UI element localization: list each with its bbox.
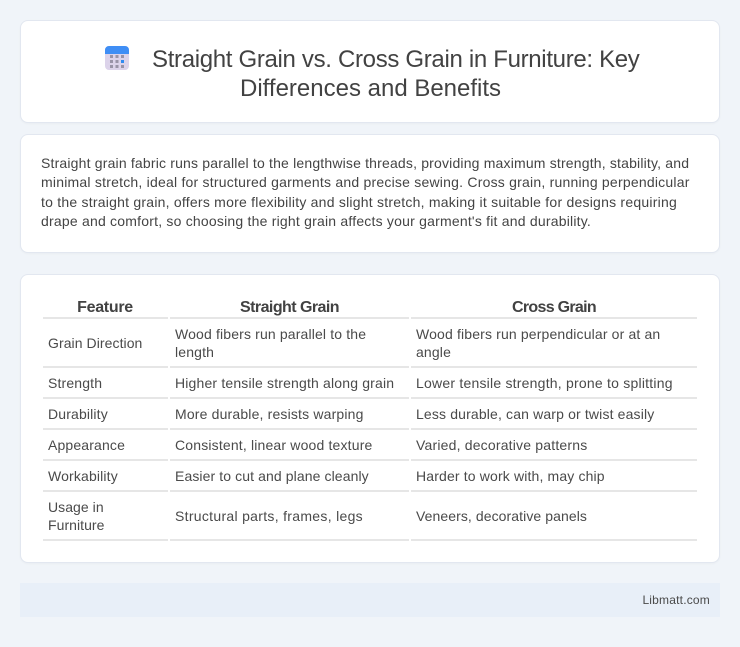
footer bar [20, 583, 720, 617]
cell: Grain Direction straight: Wood fibers run parallel to the [175, 326, 366, 342]
cell: Grain Direction cross: angle [416, 344, 451, 360]
cell: Grain Direction straight [175, 326, 366, 360]
table header: Feature: Feature [77, 299, 133, 316]
intro text: to the straight grain, offers more flexibility and slight stretch, making it suitable for designs requiring [41, 194, 677, 210]
intro text: drape and comfort, so choosing the right grain affects your garment's fit and durability. [41, 213, 591, 229]
row: Usage in Furniture [48, 499, 104, 533]
cell: Workability cross: Harder to work with, may chip [416, 468, 605, 484]
cell: Strength cross: Lower tensile strength, prone to splitting [416, 375, 673, 391]
cell: Grain Direction cross [416, 326, 660, 360]
cell: Strength straight: Higher tensile strength along grain [175, 375, 394, 391]
row: Grain Direction: Grain Direction [48, 335, 142, 351]
row: Appearance: Appearance [48, 437, 125, 453]
intro text: minimal stretch, ideal for structured garments and precise sewing. Cross grain, running perpendicular [41, 174, 690, 190]
cell: Appearance straight: Consistent, linear wood texture [175, 437, 372, 453]
title: Straight Grain vs. Cross Grain in Furniture: Key [152, 46, 639, 73]
table header: Cross Grain: Cross Grain [512, 299, 596, 316]
row: Strength: Strength [48, 375, 102, 391]
cell: Grain Direction straight: length [175, 344, 214, 360]
row: Durability: Durability [48, 406, 108, 422]
footer text: Libmatt.com [642, 593, 710, 607]
cell: Usage cross: Veneers, decorative panels [416, 508, 587, 524]
intro text [41, 155, 690, 229]
table header: Straight Grain: Straight Grain [240, 299, 339, 316]
cell: Grain Direction cross: Wood fibers run perpendicular or at an [416, 326, 660, 342]
icon: calendar [105, 46, 129, 70]
title [152, 46, 640, 102]
panel: header [20, 20, 720, 123]
row: Usage in Furniture: Usage in [48, 499, 104, 515]
row: Workability: Workability [48, 468, 118, 484]
panel: comparison table [20, 274, 720, 563]
cell: Appearance cross: Varied, decorative patterns [416, 437, 587, 453]
cell: Durability cross: Less durable, can warp or twist easily [416, 406, 654, 422]
intro text: Straight grain fabric runs parallel to the lengthwise threads, providing maximum strength, stability, and [41, 155, 689, 171]
row: Usage in Furniture: Furniture [48, 517, 104, 533]
cell: Workability straight: Easier to cut and plane cleanly [175, 468, 369, 484]
title: Differences and Benefits [240, 75, 501, 102]
panel: intro [20, 134, 720, 253]
cell: Usage straight: Structural parts, frames, legs [175, 508, 363, 524]
cell: Durability straight: More durable, resists warping [175, 406, 364, 422]
